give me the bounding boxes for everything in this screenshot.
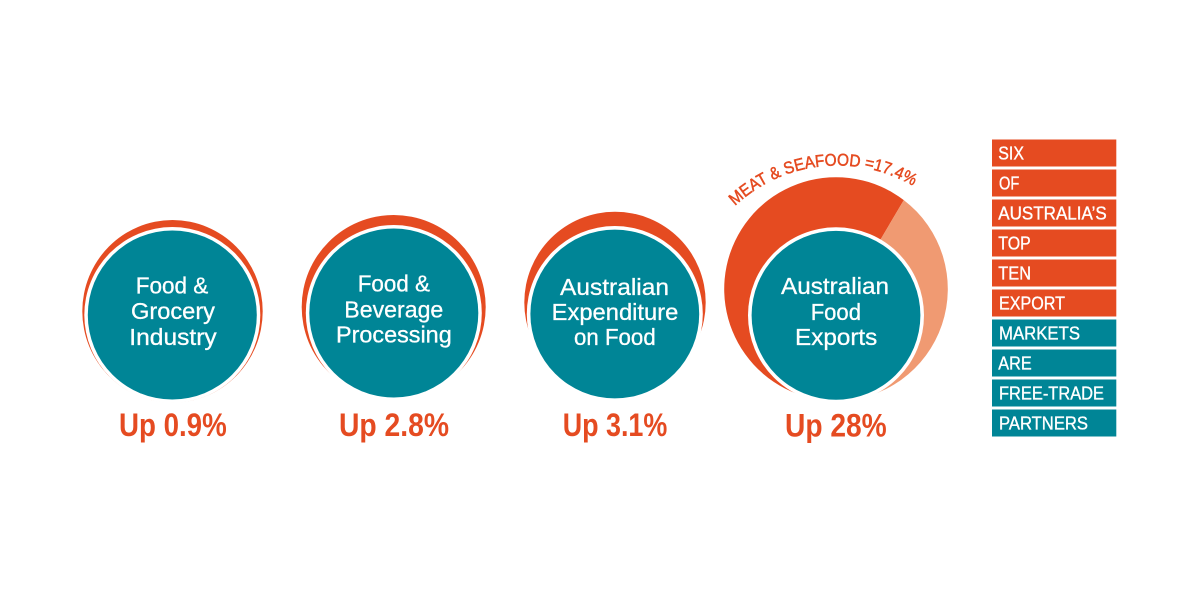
bar: six: SIX xyxy=(998,142,1024,163)
panel: food and beverage processing xyxy=(302,215,486,443)
circle label: Grocery xyxy=(131,298,215,324)
curved label: meat and seafood: MEAT & SEAFOOD =17.4% xyxy=(728,154,917,206)
circle label xyxy=(781,273,889,350)
bar: six xyxy=(992,140,1116,166)
white ring xyxy=(84,227,260,403)
bar: markets xyxy=(992,320,1116,346)
meat and seafood share xyxy=(836,200,948,401)
circle label: Food xyxy=(811,299,861,325)
bar: are xyxy=(992,350,1116,376)
growth figure: Up 3.1% xyxy=(563,407,667,443)
bar: of: OF xyxy=(999,172,1019,193)
growth crescent xyxy=(82,220,263,403)
circle label xyxy=(129,272,217,350)
circle label: Beverage xyxy=(344,296,443,322)
circle label: Australian xyxy=(781,273,889,299)
bar: top: TOP xyxy=(998,232,1031,253)
bar: ten: TEN xyxy=(998,262,1031,283)
bar: markets: MARKETS xyxy=(999,322,1080,343)
bar: top xyxy=(992,230,1116,256)
circle label: Australian xyxy=(560,274,669,300)
circle label: Food & xyxy=(358,271,430,297)
growth figure: Up 28% xyxy=(785,408,887,444)
bar: australia's: AUSTRALIA’S xyxy=(998,202,1107,223)
teal circle xyxy=(309,228,478,398)
panel: food and grocery industry xyxy=(82,220,263,443)
growth figure: Up 0.9% xyxy=(119,407,227,443)
remaining exports share xyxy=(724,177,904,401)
white ring xyxy=(306,225,482,401)
circle label xyxy=(552,274,678,350)
bar: export xyxy=(992,290,1116,316)
white ring xyxy=(527,226,703,402)
circle label: on Food xyxy=(574,324,656,350)
growth crescent xyxy=(302,215,486,399)
circle label: Expenditure xyxy=(552,299,678,325)
bar: are: ARE xyxy=(998,352,1032,373)
bar: free-trade: FREE-TRADE xyxy=(999,382,1104,403)
bar: export: EXPORT xyxy=(999,292,1065,313)
teal circle xyxy=(752,231,920,400)
bar: of xyxy=(992,170,1116,196)
teal circle xyxy=(530,230,699,398)
circle label: Food & xyxy=(136,272,209,298)
bar: ten xyxy=(992,260,1116,286)
white ring xyxy=(748,227,924,403)
growth crescent xyxy=(524,212,706,393)
teal circle xyxy=(88,230,257,400)
panel: australian food exports xyxy=(724,154,948,444)
circle label xyxy=(336,271,452,348)
panel: export markets list xyxy=(992,140,1116,436)
bar: partners xyxy=(992,410,1116,436)
bar: partners: PARTNERS xyxy=(999,412,1088,433)
circle label: Exports xyxy=(795,324,877,350)
circle label: Processing xyxy=(336,322,452,348)
growth figure: Up 2.8% xyxy=(339,407,449,443)
circle label: Industry xyxy=(129,324,217,350)
panel: australian expenditure on food xyxy=(524,212,706,443)
